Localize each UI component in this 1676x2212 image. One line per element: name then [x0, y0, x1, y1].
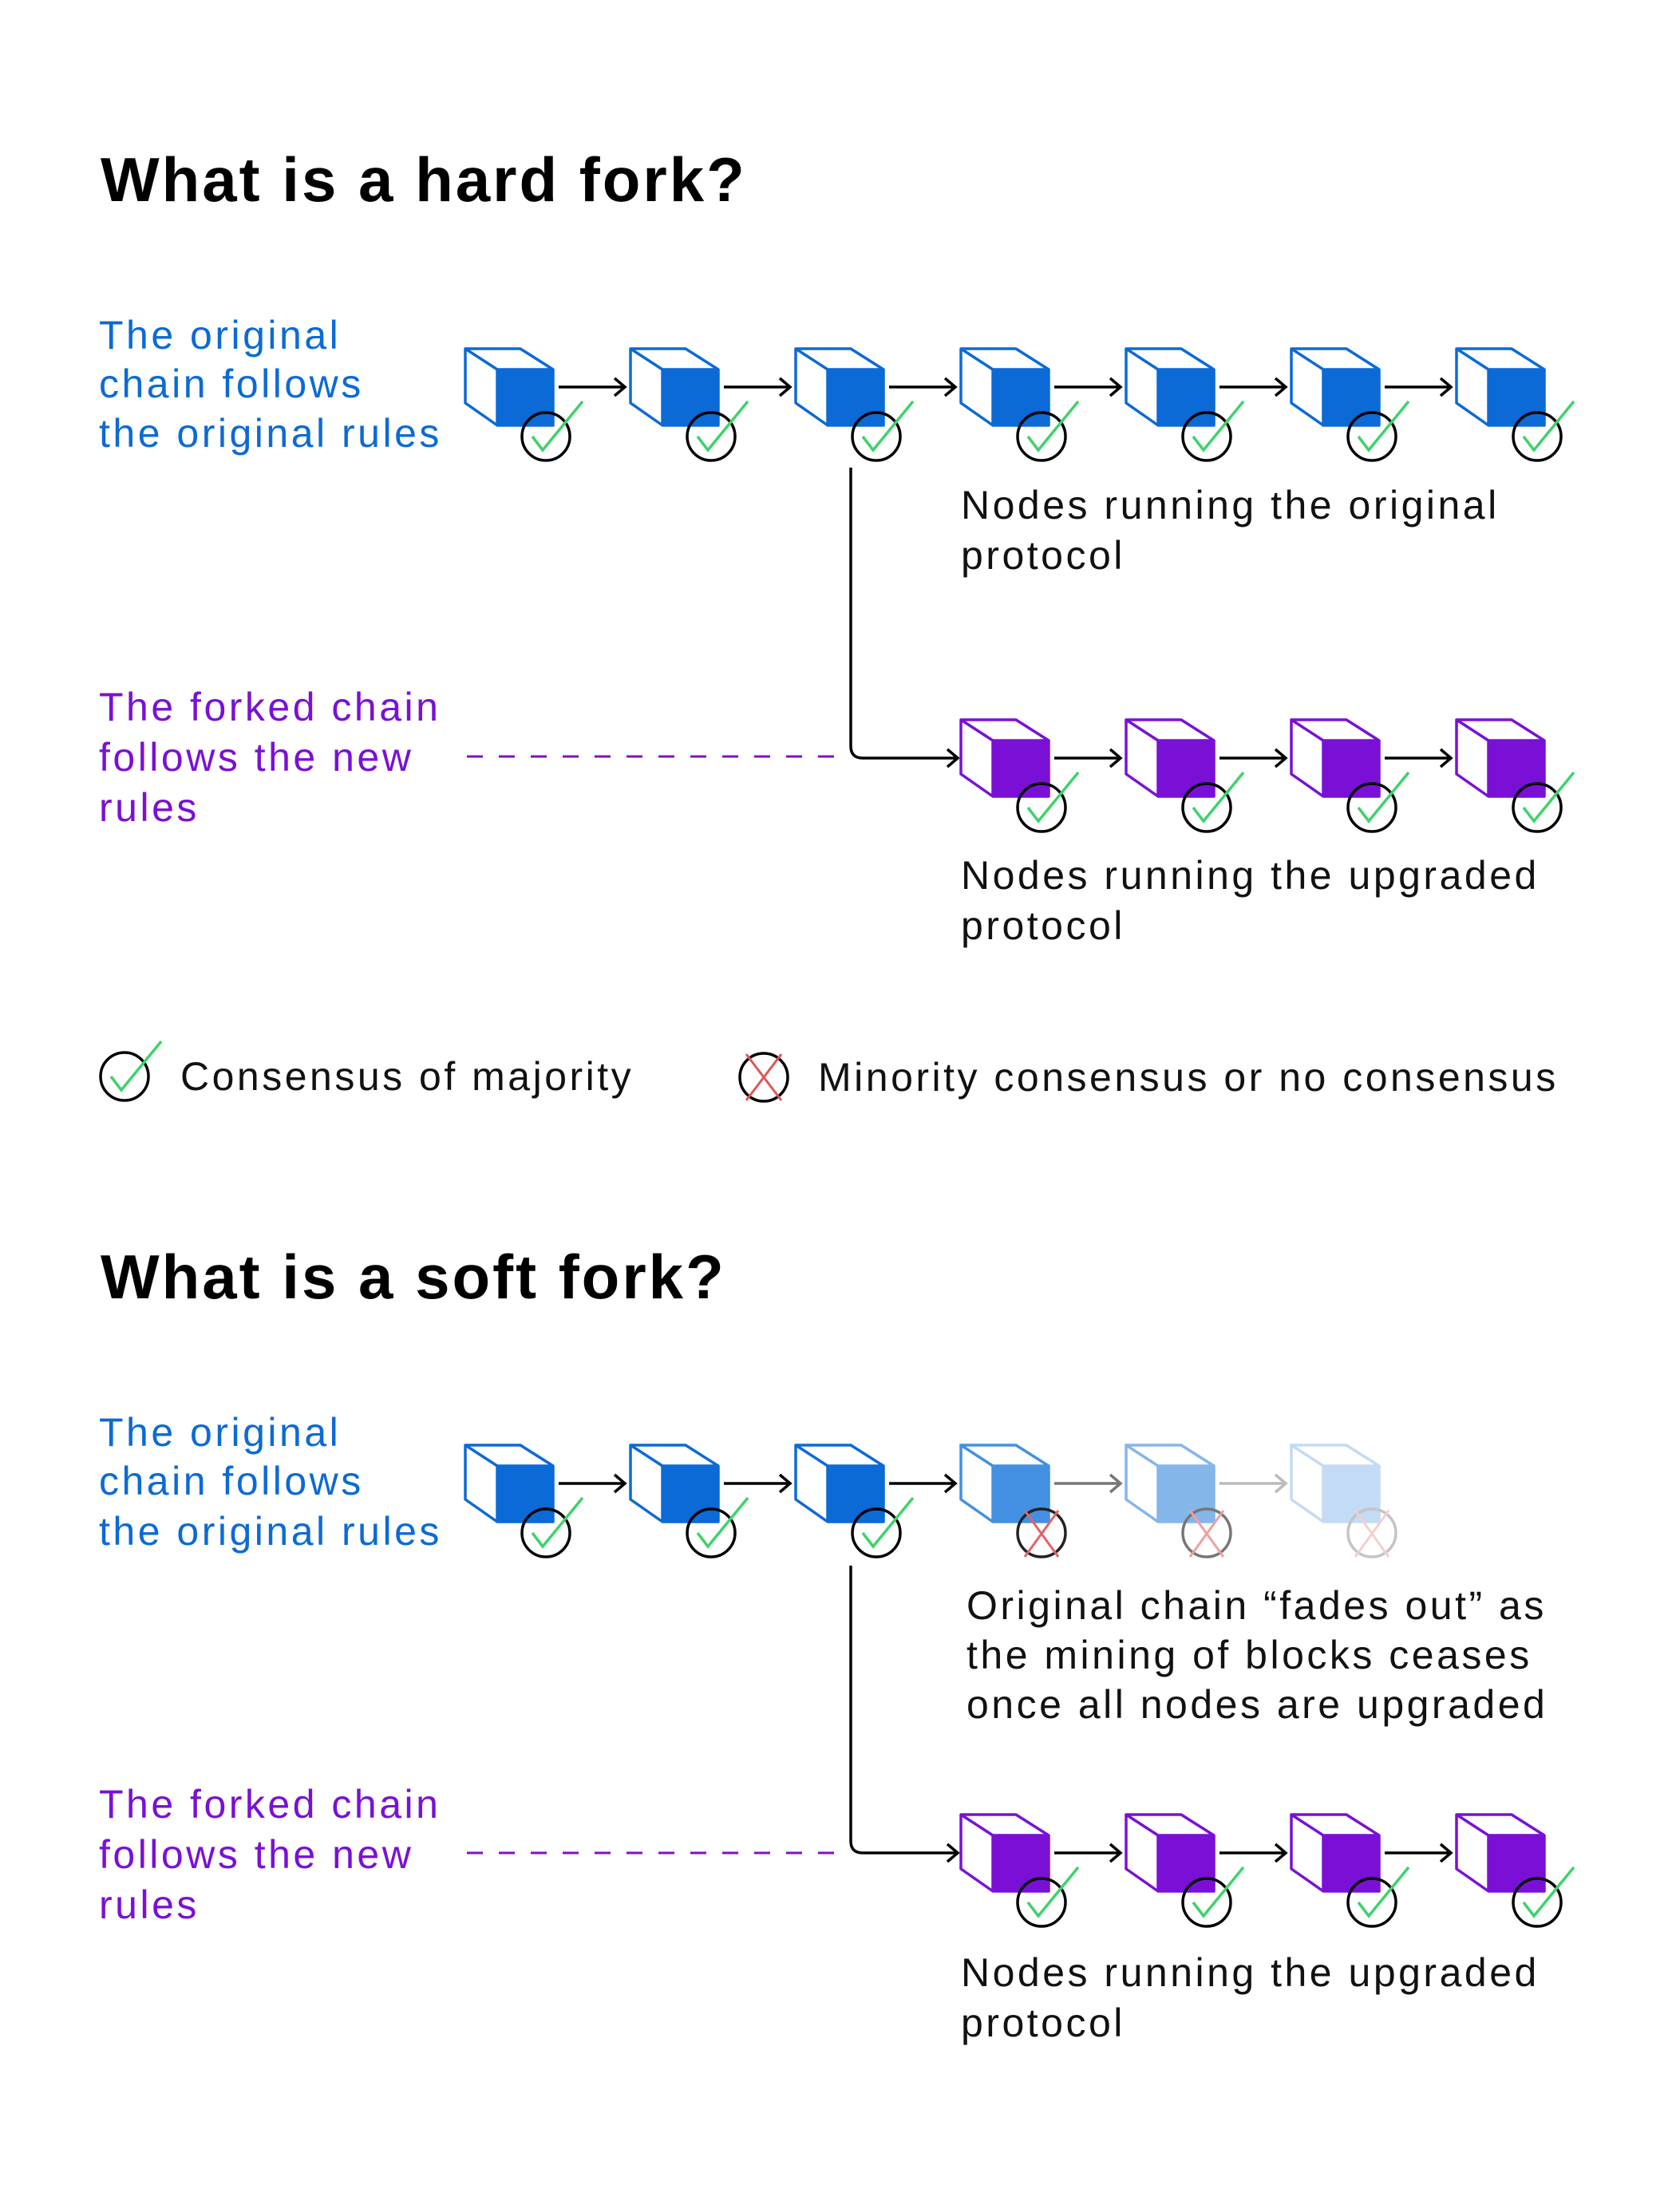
- icon: check: [101, 1041, 161, 1100]
- title: hard fork: What is a hard fork?: [101, 144, 747, 215]
- dashed connector (soft): [467, 1851, 835, 1855]
- legend: Minority consensus or no consensus: [818, 1055, 1559, 1100]
- label: original chain (hard): the original rules: [99, 411, 442, 456]
- caption: original protocol: protocol: [961, 533, 1125, 578]
- fork arrow (hard): [851, 468, 958, 767]
- label: original chain (soft): the original rules: [99, 1509, 442, 1554]
- caption: upgraded protocol (soft): Nodes running the upgraded: [961, 1950, 1540, 1995]
- label: original chain (hard): chain follows: [99, 361, 364, 406]
- legend: [101, 1041, 1559, 1101]
- caption: original protocol: Nodes running the original: [961, 483, 1500, 527]
- caption: upgraded protocol (hard): protocol: [961, 903, 1125, 948]
- caption: upgraded protocol (hard): Nodes running the upgraded: [961, 853, 1540, 898]
- original chain (soft, fading): [465, 1445, 1396, 1557]
- label: original chain (soft): chain follows: [99, 1459, 364, 1503]
- label: original chain (hard): The original: [99, 313, 341, 357]
- caption: fades out: Original chain “fades out” as: [966, 1583, 1547, 1628]
- caption: fades out: once all nodes are upgraded: [966, 1682, 1548, 1727]
- title: soft fork: What is a soft fork?: [101, 1242, 726, 1312]
- label: forked chain (hard): The forked chain: [99, 685, 441, 729]
- forked chain (soft): [961, 1815, 1574, 1926]
- forked chain (hard): [961, 720, 1574, 831]
- label: forked chain (hard): follows the new: [99, 735, 413, 780]
- dashed connector (hard): [467, 755, 835, 758]
- label: forked chain (soft): follows the new: [99, 1832, 413, 1877]
- original chain (hard): [465, 349, 1574, 460]
- caption: fades out: the mining of blocks ceases: [966, 1633, 1532, 1677]
- legend: Consensus of majority: [180, 1054, 634, 1099]
- icon: cross: [740, 1053, 788, 1101]
- label: original chain (soft): The original: [99, 1410, 341, 1455]
- label: forked chain (hard): rules: [99, 785, 200, 830]
- label: forked chain (soft): rules: [99, 1882, 200, 1927]
- label: forked chain (soft): The forked chain: [99, 1782, 441, 1827]
- caption: upgraded protocol (soft): protocol: [961, 2001, 1125, 2045]
- fork arrow (soft): [851, 1566, 958, 1862]
